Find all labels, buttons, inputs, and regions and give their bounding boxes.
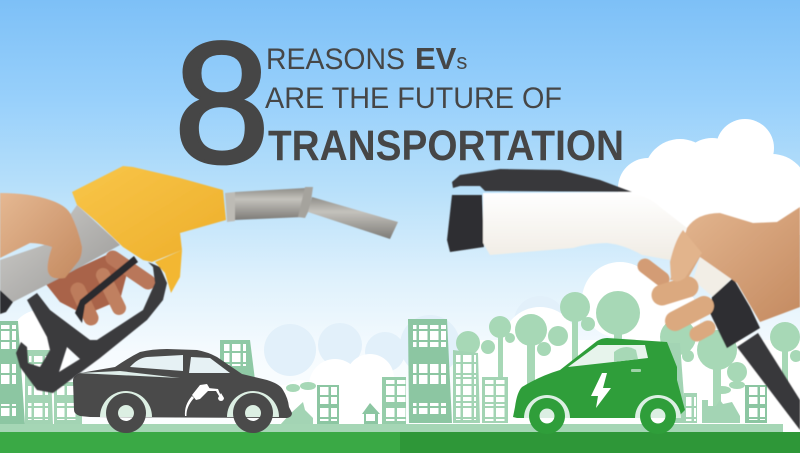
back of hand [670,207,800,322]
door handle [631,369,641,372]
finger four [697,328,708,334]
white handle [483,192,687,260]
finger one [645,266,662,279]
connector top [452,169,632,192]
spout ring [298,187,313,218]
car wheels [529,398,676,434]
hand palm [0,193,82,278]
back fingers [45,252,148,318]
trigger guard [16,262,167,393]
charging connector with hand [447,169,800,430]
title [174,7,624,199]
car body [513,338,685,418]
finger two [662,287,688,295]
line: are the future of: ARE THE FUTURE OF [265,82,562,115]
tree seen through window [614,347,638,362]
line: transportation: TRANSPORTATION [268,122,624,170]
cable [737,333,800,430]
pale ground strip [0,424,783,432]
fuel nozzle with hand [0,166,398,393]
green city skyline [0,291,800,432]
icon: fuel pump on car [185,384,224,416]
spout tip [308,197,398,239]
yellow grip [72,166,226,262]
ground band [0,432,800,453]
hose end [0,290,13,314]
line: reasons EVs: REASONS [266,43,405,76]
silver handle [0,205,120,302]
trigger lever [75,256,138,323]
clouds: upper right [618,119,800,248]
gas car [73,349,292,433]
grip end [693,257,733,297]
car body [73,349,292,418]
car wheels [106,393,273,433]
left buildings [0,321,407,425]
line: reasons EVs: s [456,49,467,74]
spout pipe [235,188,305,220]
yellow lip [155,250,182,293]
numeral 8: 8 [174,7,270,199]
car windows [130,355,230,373]
line: reasons EVs: EV [415,41,457,76]
wheel arches [524,395,681,418]
right buildings [408,319,767,423]
spout collar [225,192,235,222]
clouds: lower horizon [0,262,800,430]
trees [286,291,800,415]
car trim line [77,371,180,378]
hand [645,207,800,334]
cable strain relief [710,278,760,348]
car window [568,345,648,367]
icon: lightning bolt [591,373,611,408]
thumb [670,230,702,282]
electric car [513,338,685,434]
finger three [675,306,704,321]
wheel arches [100,391,279,417]
connector plug [447,195,484,252]
